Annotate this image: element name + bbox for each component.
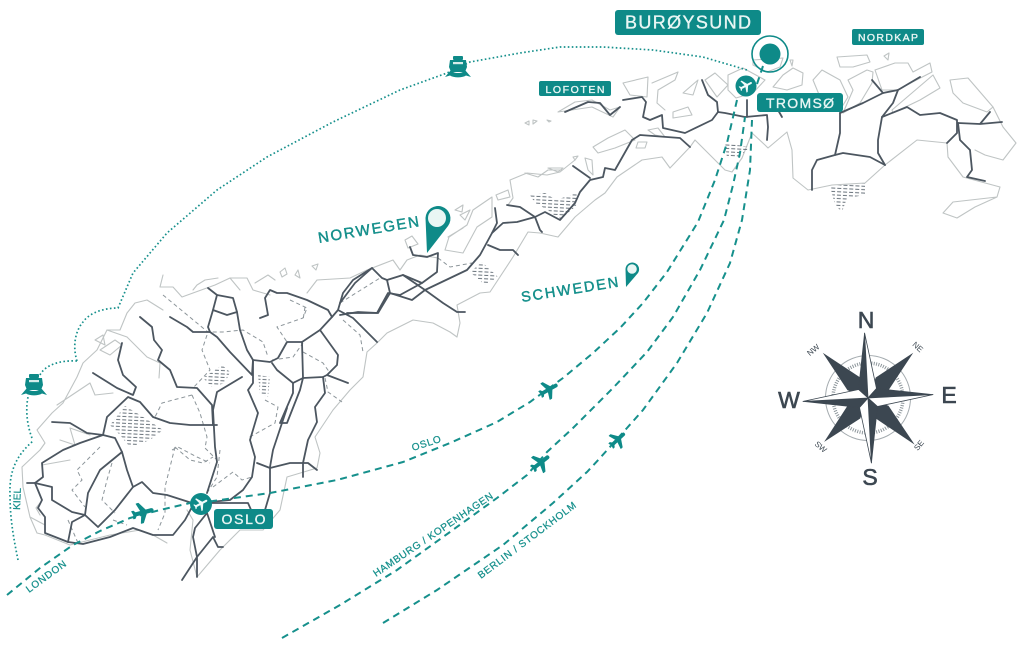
link Tromsø to Burøysund	[757, 66, 763, 84]
icon: plane on Oslo route	[536, 377, 562, 402]
icon: ferry north	[445, 56, 471, 77]
flight route: Hamburg / Kopenhagen	[282, 117, 745, 638]
marker: Tromsø airport	[736, 76, 756, 96]
label: Tromsø: TROMSØ	[766, 95, 834, 111]
route label: London: LONDON	[24, 559, 69, 595]
label: Nordkap: NORDKAP	[858, 32, 918, 44]
label: Oslo	[214, 509, 273, 529]
label: Burøysund	[615, 10, 761, 35]
route label: Hamburg / Kopenhagen: HAMBURG / KOPENHAGEN	[372, 491, 495, 579]
icon: plane on Berlin route	[605, 427, 630, 452]
flight route: Berlin / Stockholm	[383, 120, 752, 623]
route label: Kiel: KIEL	[12, 487, 24, 510]
marker: Burøysund	[752, 36, 788, 72]
hatched areas (mountain and glacier zones)	[110, 143, 865, 447]
icon: plane near London	[130, 500, 156, 525]
label: Lofoten: LOFOTEN	[546, 84, 604, 96]
compass rose: S	[862, 464, 878, 490]
label: Burøysund: BURØYSUND	[625, 12, 751, 32]
compass rose: W	[778, 387, 800, 413]
compass rose: SE	[912, 438, 926, 452]
label: Lofoten	[539, 81, 611, 96]
ferry route: Kiel to Burøysund	[10, 47, 747, 560]
route label: Berlin / Stockholm: BERLIN / STOCKHOLM	[476, 500, 579, 581]
icon: ferry south	[21, 374, 47, 395]
label: Tromsø	[757, 93, 843, 112]
pin: Schweden	[626, 263, 639, 287]
compass rose	[778, 307, 957, 490]
coastline and borders	[22, 53, 1016, 577]
compass rose: NW	[805, 342, 822, 358]
route label: Oslo: OSLO	[411, 434, 443, 454]
country label: Schweden: SCHWEDEN	[520, 275, 619, 306]
flight route: London – Oslo – Tromsø	[7, 100, 737, 595]
secondary roads	[68, 258, 472, 543]
main roads	[27, 77, 1002, 580]
compass rose: N	[858, 307, 874, 333]
label: Oslo: OSLO	[222, 511, 266, 527]
pin: Norwegen	[426, 206, 450, 253]
country label: Norwegen: NORWEGEN	[317, 213, 420, 247]
compass rose: E	[941, 382, 957, 408]
marker: Oslo airport	[190, 493, 212, 515]
label: Nordkap	[852, 29, 924, 45]
icon: plane on Hamburg route	[527, 449, 554, 476]
compass rose: NE	[911, 340, 925, 354]
compass rose: SW	[813, 439, 829, 455]
